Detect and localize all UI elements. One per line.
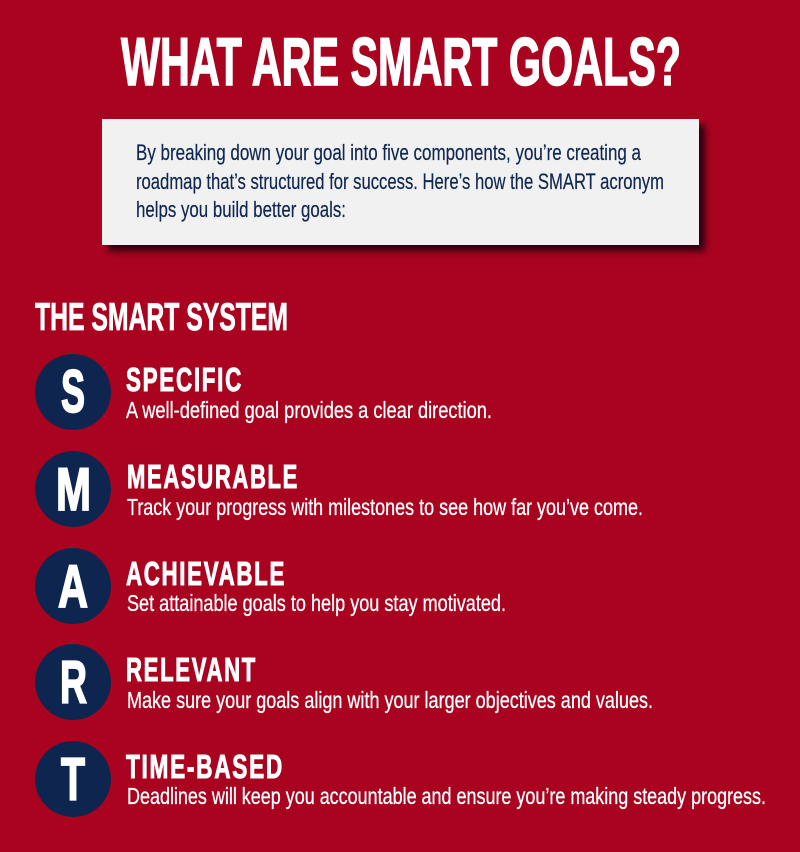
icon: letter R bbox=[35, 644, 111, 720]
intro text: helps you build better goals: bbox=[136, 197, 346, 222]
achievable heading: ACHIEVABLE bbox=[126, 555, 286, 592]
icon: letter M: M bbox=[56, 456, 91, 523]
icon: letter R: R bbox=[60, 649, 87, 716]
icon: letter T: T bbox=[61, 746, 85, 813]
panel: intro bbox=[102, 119, 705, 251]
heading: the smart system: THE SMART SYSTEM bbox=[35, 296, 288, 339]
icon: letter S: S bbox=[61, 358, 85, 425]
item: measurable bbox=[35, 451, 643, 527]
specific description: A well-defined goal provides a clear direction. bbox=[126, 397, 492, 423]
measurable description: Track your progress with milestones to see how far you’ve come. bbox=[127, 494, 643, 520]
icon: letter M bbox=[35, 451, 111, 527]
item: relevant bbox=[35, 644, 653, 720]
icon: letter T bbox=[35, 741, 111, 817]
intro text: By breaking down your goal into five components, you’re creating a bbox=[136, 140, 642, 165]
icon: letter A: A bbox=[58, 553, 88, 620]
icon: letter A bbox=[35, 548, 111, 624]
time-based heading: TIME-BASED bbox=[126, 748, 284, 785]
icon: letter S bbox=[35, 354, 111, 430]
intro text bbox=[136, 140, 664, 222]
measurable heading: MEASURABLE bbox=[127, 458, 299, 495]
relevant description: Make sure your goals align with your larger objectives and values. bbox=[127, 687, 653, 713]
item: specific bbox=[35, 354, 492, 430]
achievable description: Set attainable goals to help you stay motivated. bbox=[127, 590, 506, 616]
specific heading: SPECIFIC bbox=[126, 361, 243, 398]
item: time-based bbox=[35, 741, 766, 817]
relevant heading: RELEVANT bbox=[126, 651, 257, 688]
item: achievable bbox=[35, 548, 506, 624]
